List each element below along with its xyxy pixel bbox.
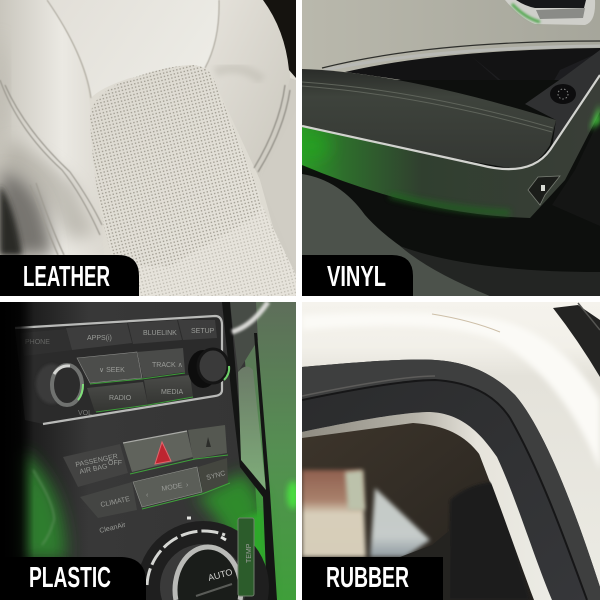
button: hazard bbox=[123, 431, 193, 472]
button: phone bbox=[20, 329, 72, 356]
white trim line bbox=[302, 75, 600, 169]
dark corner trim bbox=[553, 303, 600, 377]
rear seat bbox=[448, 482, 530, 600]
stitching bbox=[0, 80, 102, 235]
button: mode bbox=[133, 467, 202, 507]
panel: vinyl bbox=[294, 0, 600, 296]
centre back bbox=[64, 0, 219, 97]
lock switch bbox=[528, 176, 560, 205]
button: bluelink bbox=[128, 320, 182, 344]
panel: rubber bbox=[302, 302, 600, 600]
climate control buttons bbox=[63, 425, 230, 518]
console base bbox=[4, 302, 257, 565]
silver trim bbox=[325, 46, 600, 70]
right side leather bbox=[260, 78, 296, 274]
lower vinyl bbox=[302, 174, 490, 296]
door handle bbox=[505, 0, 595, 25]
button: mode: ‹ bbox=[146, 492, 149, 499]
climate dial: AUTO bbox=[207, 567, 234, 583]
button: setup: SETUP bbox=[191, 328, 215, 335]
dark window recess bbox=[345, 48, 600, 80]
button: radio bbox=[87, 382, 148, 412]
green under dial bbox=[192, 466, 264, 531]
dark corner behind seat bbox=[263, 0, 296, 78]
scratch mark bbox=[432, 314, 500, 332]
rubber seal bbox=[302, 359, 600, 600]
button: passenger air bag: OFF bbox=[108, 460, 122, 467]
lower trim band with green bbox=[302, 75, 600, 218]
grey upper side panel bbox=[230, 302, 258, 372]
perforated centre panel bbox=[137, 65, 260, 264]
temp button bbox=[238, 518, 254, 596]
clean air label: CleanAir bbox=[99, 521, 127, 535]
button: seek bbox=[77, 352, 142, 383]
label: rubber bbox=[302, 557, 443, 600]
armrest stitching bbox=[302, 82, 553, 132]
seam lines bbox=[47, 0, 219, 98]
door control knob bbox=[550, 84, 576, 104]
label: vinyl: VINYL bbox=[327, 261, 386, 293]
button: passenger air bag: PASSENGER bbox=[75, 453, 119, 469]
button: sync: SYNC bbox=[206, 470, 226, 482]
volume label: VOL bbox=[78, 410, 92, 417]
button: apps bbox=[66, 323, 132, 350]
label: rubber: RUBBER bbox=[326, 562, 409, 594]
label: leather bbox=[0, 255, 139, 296]
button: passenger air bag: AIR BAG bbox=[79, 463, 108, 476]
button: seek: ∨ SEEK bbox=[99, 367, 125, 374]
armrest bbox=[302, 69, 556, 168]
button: climate: CLIMATE bbox=[100, 496, 131, 509]
panel: leather bbox=[0, 0, 296, 296]
speaker grille bbox=[552, 118, 600, 226]
pale door liner strip bbox=[302, 412, 552, 600]
right bolster bbox=[240, 43, 290, 180]
side vent panel bbox=[238, 366, 266, 490]
button: seat bbox=[188, 425, 227, 459]
knob plate bbox=[525, 50, 600, 148]
button: phone: PHONE bbox=[25, 339, 50, 346]
button: mode: MODE bbox=[161, 482, 183, 493]
right side panel bbox=[240, 302, 296, 600]
left edge fade bbox=[0, 302, 34, 600]
leather seat base bbox=[61, 22, 296, 267]
button: climate bbox=[80, 482, 137, 518]
button: sync bbox=[198, 458, 228, 493]
radio fascia bbox=[15, 316, 222, 424]
button: media bbox=[144, 375, 193, 405]
rear window bbox=[302, 470, 366, 557]
left knob bbox=[36, 364, 83, 405]
lower perforated cushion bbox=[138, 206, 296, 296]
label: vinyl bbox=[302, 255, 413, 296]
right knob bbox=[188, 349, 229, 388]
green glow right bbox=[590, 104, 600, 130]
upper door surface bbox=[302, 0, 600, 80]
panel: plastic bbox=[0, 302, 299, 600]
window highlight bbox=[345, 470, 365, 510]
left bolster bbox=[0, 0, 83, 255]
temp button: TEMP bbox=[246, 543, 253, 563]
blurred green left bbox=[22, 450, 66, 560]
seal outer lip bbox=[302, 359, 600, 600]
climate dial bbox=[137, 518, 269, 600]
button: setup bbox=[178, 320, 217, 340]
white trim top right bbox=[232, 302, 268, 332]
button: bluelink: BLUELINK bbox=[143, 330, 177, 337]
button: apps: APPS(i) bbox=[87, 335, 112, 342]
shadows on seat bbox=[0, 30, 8, 150]
button: track bbox=[137, 348, 185, 378]
lower dark body bbox=[302, 80, 600, 296]
white car body bbox=[302, 302, 600, 600]
button: media: MEDIA bbox=[161, 389, 184, 396]
icon: hazard triangle bbox=[155, 442, 171, 464]
button: radio: RADIO bbox=[109, 395, 132, 402]
dark lower-left bolster bbox=[0, 172, 52, 255]
radio unit bbox=[15, 316, 229, 424]
label: plastic: PLASTIC bbox=[29, 562, 111, 594]
dark vertical strip bbox=[222, 302, 277, 600]
label: plastic bbox=[0, 557, 146, 600]
button: passenger air bag bbox=[63, 444, 128, 487]
label: leather: LEATHER bbox=[23, 261, 110, 293]
rear side window bbox=[370, 488, 430, 557]
button: track: TRACK ∧ bbox=[152, 362, 183, 369]
car interior bbox=[302, 420, 535, 600]
button: mode: › bbox=[186, 482, 189, 489]
